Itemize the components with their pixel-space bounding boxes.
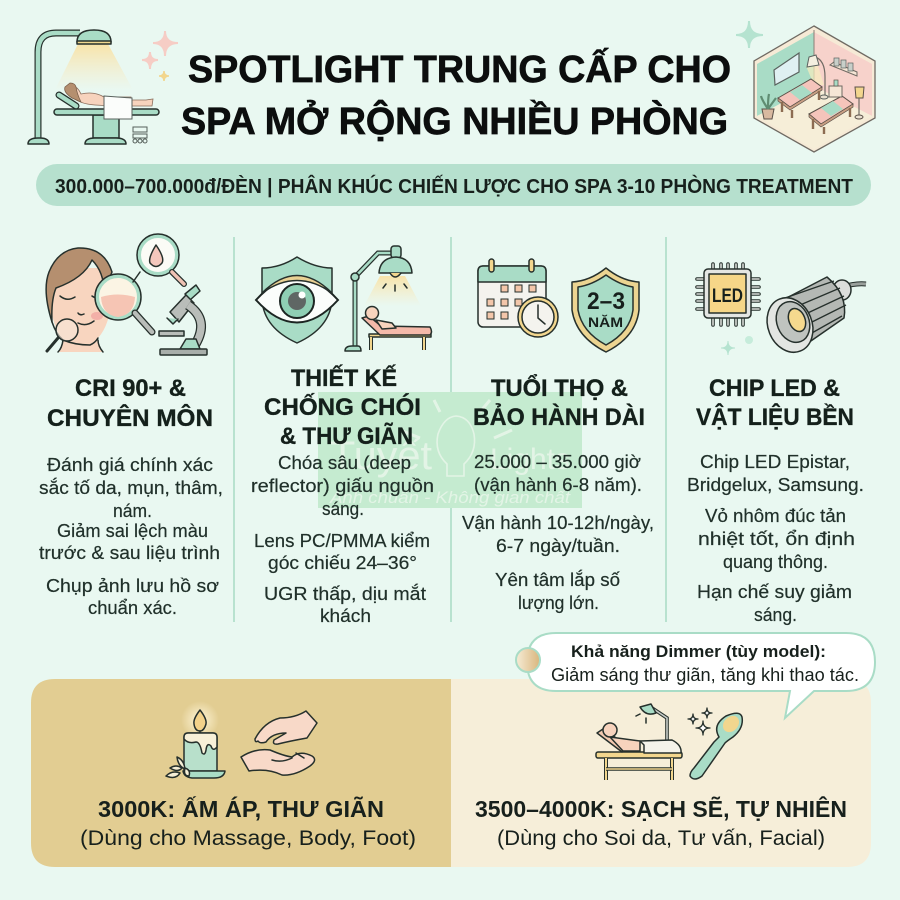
icon: mint sparkle <box>736 21 763 48</box>
heading <box>47 375 213 432</box>
panel: CRI 90+ and expertise <box>39 234 223 618</box>
text block: Đánh giá chính xác <box>47 455 213 475</box>
text block <box>462 452 654 613</box>
text block: trước & sau liệu trình <box>39 543 220 563</box>
heading: & THƯ GIÃN <box>280 422 413 450</box>
heading: CRI 90+ & <box>75 375 186 402</box>
text block: Bridgelux, Samsung. <box>687 475 864 495</box>
text block: Hạn chế suy giảm <box>697 582 852 602</box>
icon: LED chip and spotlight <box>697 264 866 359</box>
text block: sáng. <box>322 499 364 519</box>
text block: nhiệt tốt, ổn định <box>698 529 855 549</box>
text block: (vận hành 6-8 năm). <box>474 475 642 495</box>
heading <box>264 364 421 450</box>
icon: calendar, clock and warranty shield: 2–3 <box>587 288 625 315</box>
text block: reflector) giấu nguồn <box>251 476 434 496</box>
heading: CHUYÊN MÔN <box>47 404 213 432</box>
panel: warm 3000K <box>31 679 451 867</box>
title: SPA MỞ RỘNG NHIỀU PHÒNG <box>181 98 728 143</box>
text block: Vỏ nhôm đúc tản <box>705 506 846 526</box>
text block: 25.000 – 35.000 giờ <box>474 452 641 472</box>
text block: góc chiếu 24–36° <box>268 553 417 573</box>
text block: UGR thấp, dịu mắt <box>264 583 426 604</box>
text block: Giảm sai lệch màu <box>57 521 208 541</box>
callout: dimmer capability: Khả năng Dimmer (tùy model): <box>571 642 826 661</box>
column dividers <box>234 237 666 622</box>
text block: Yên tâm lắp số <box>495 569 620 590</box>
heading: 3500–4000K: SẠCH SẼ, TỰ NHIÊN <box>475 795 847 822</box>
watermark: Tuyết <box>330 434 432 478</box>
panel: anti-glare design <box>251 246 434 626</box>
title <box>181 47 731 143</box>
text block: quang thông. <box>723 552 828 572</box>
heading <box>696 375 854 431</box>
icon: calendar, clock and warranty shield: NĂM <box>588 314 623 330</box>
text block: Lens PC/PMMA kiểm <box>254 531 430 551</box>
text block: 6-7 ngày/tuần. <box>496 536 620 556</box>
panel: lifespan and warranty <box>462 259 654 613</box>
icon: calendar, clock and warranty shield <box>478 259 639 352</box>
callout: dimmer capability <box>516 633 875 718</box>
text block <box>251 453 434 626</box>
watermark <box>318 392 582 508</box>
icon: isometric spa room <box>754 26 875 152</box>
text block: Chóa sâu (deep <box>278 453 411 473</box>
heading: 3000K: ẤM ÁP, THƯ GIÃN <box>98 795 384 822</box>
heading: BẢO HÀNH DÀI <box>473 402 645 431</box>
text block: Vận hành 10-12h/ngày, <box>462 513 654 533</box>
panel: neutral 3500-4000K <box>451 679 871 867</box>
text block: Chụp ảnh lưu hồ sơ <box>46 576 219 596</box>
callout: dimmer capability: Giảm sáng thư giãn, tăng khi thao tác. <box>551 665 859 685</box>
text block: sắc tố da, mụn, thâm, <box>39 477 223 498</box>
title: SPOTLIGHT TRUNG CẤP CHO <box>188 47 731 91</box>
text block: khách <box>320 606 371 626</box>
banner pill: 300.000–700.000đ/ĐÈN | PHÂN KHÚC CHIẾN LƯỢC CHO SPA 3-10 PHÒNG TREATMENT <box>55 174 853 198</box>
text block <box>687 452 864 625</box>
text block: nám. <box>113 501 152 521</box>
icon: face with magnifiers and microscope <box>46 234 207 355</box>
heading: TUỔI THỌ & <box>491 374 628 402</box>
icon: bed, lamp and skin spatula <box>596 704 742 780</box>
text block: chuẩn xác. <box>88 598 177 618</box>
watermark: Lights <box>490 443 570 476</box>
heading: CHỐNG CHÓI <box>264 393 421 421</box>
icon: candle and hands <box>166 701 317 778</box>
text block: lượng lớn. <box>518 593 599 613</box>
icon: eye shield and lamp over bed <box>256 246 432 351</box>
text block <box>39 455 223 618</box>
icon: pink and yellow sparkles <box>142 31 178 81</box>
heading: THIẾT KẾ <box>291 364 397 392</box>
watermark: Ánh chuẩn - Không gian chất <box>329 488 571 507</box>
text block: sáng. <box>754 605 797 625</box>
icon: treatment bed under lamp <box>28 30 159 144</box>
caption: (Dùng cho Soi da, Tư vấn, Facial) <box>497 827 825 850</box>
caption: (Dùng cho Massage, Body, Foot) <box>80 827 416 850</box>
icon: LED chip and spotlight: LED <box>712 286 743 307</box>
heading: VẬT LIỆU BỀN <box>696 403 854 431</box>
banner pill <box>36 164 871 206</box>
text block: Chip LED Epistar, <box>700 452 850 472</box>
heading: CHIP LED & <box>709 375 840 402</box>
panel: LED chip and durable materials <box>687 264 866 625</box>
heading <box>473 374 645 431</box>
